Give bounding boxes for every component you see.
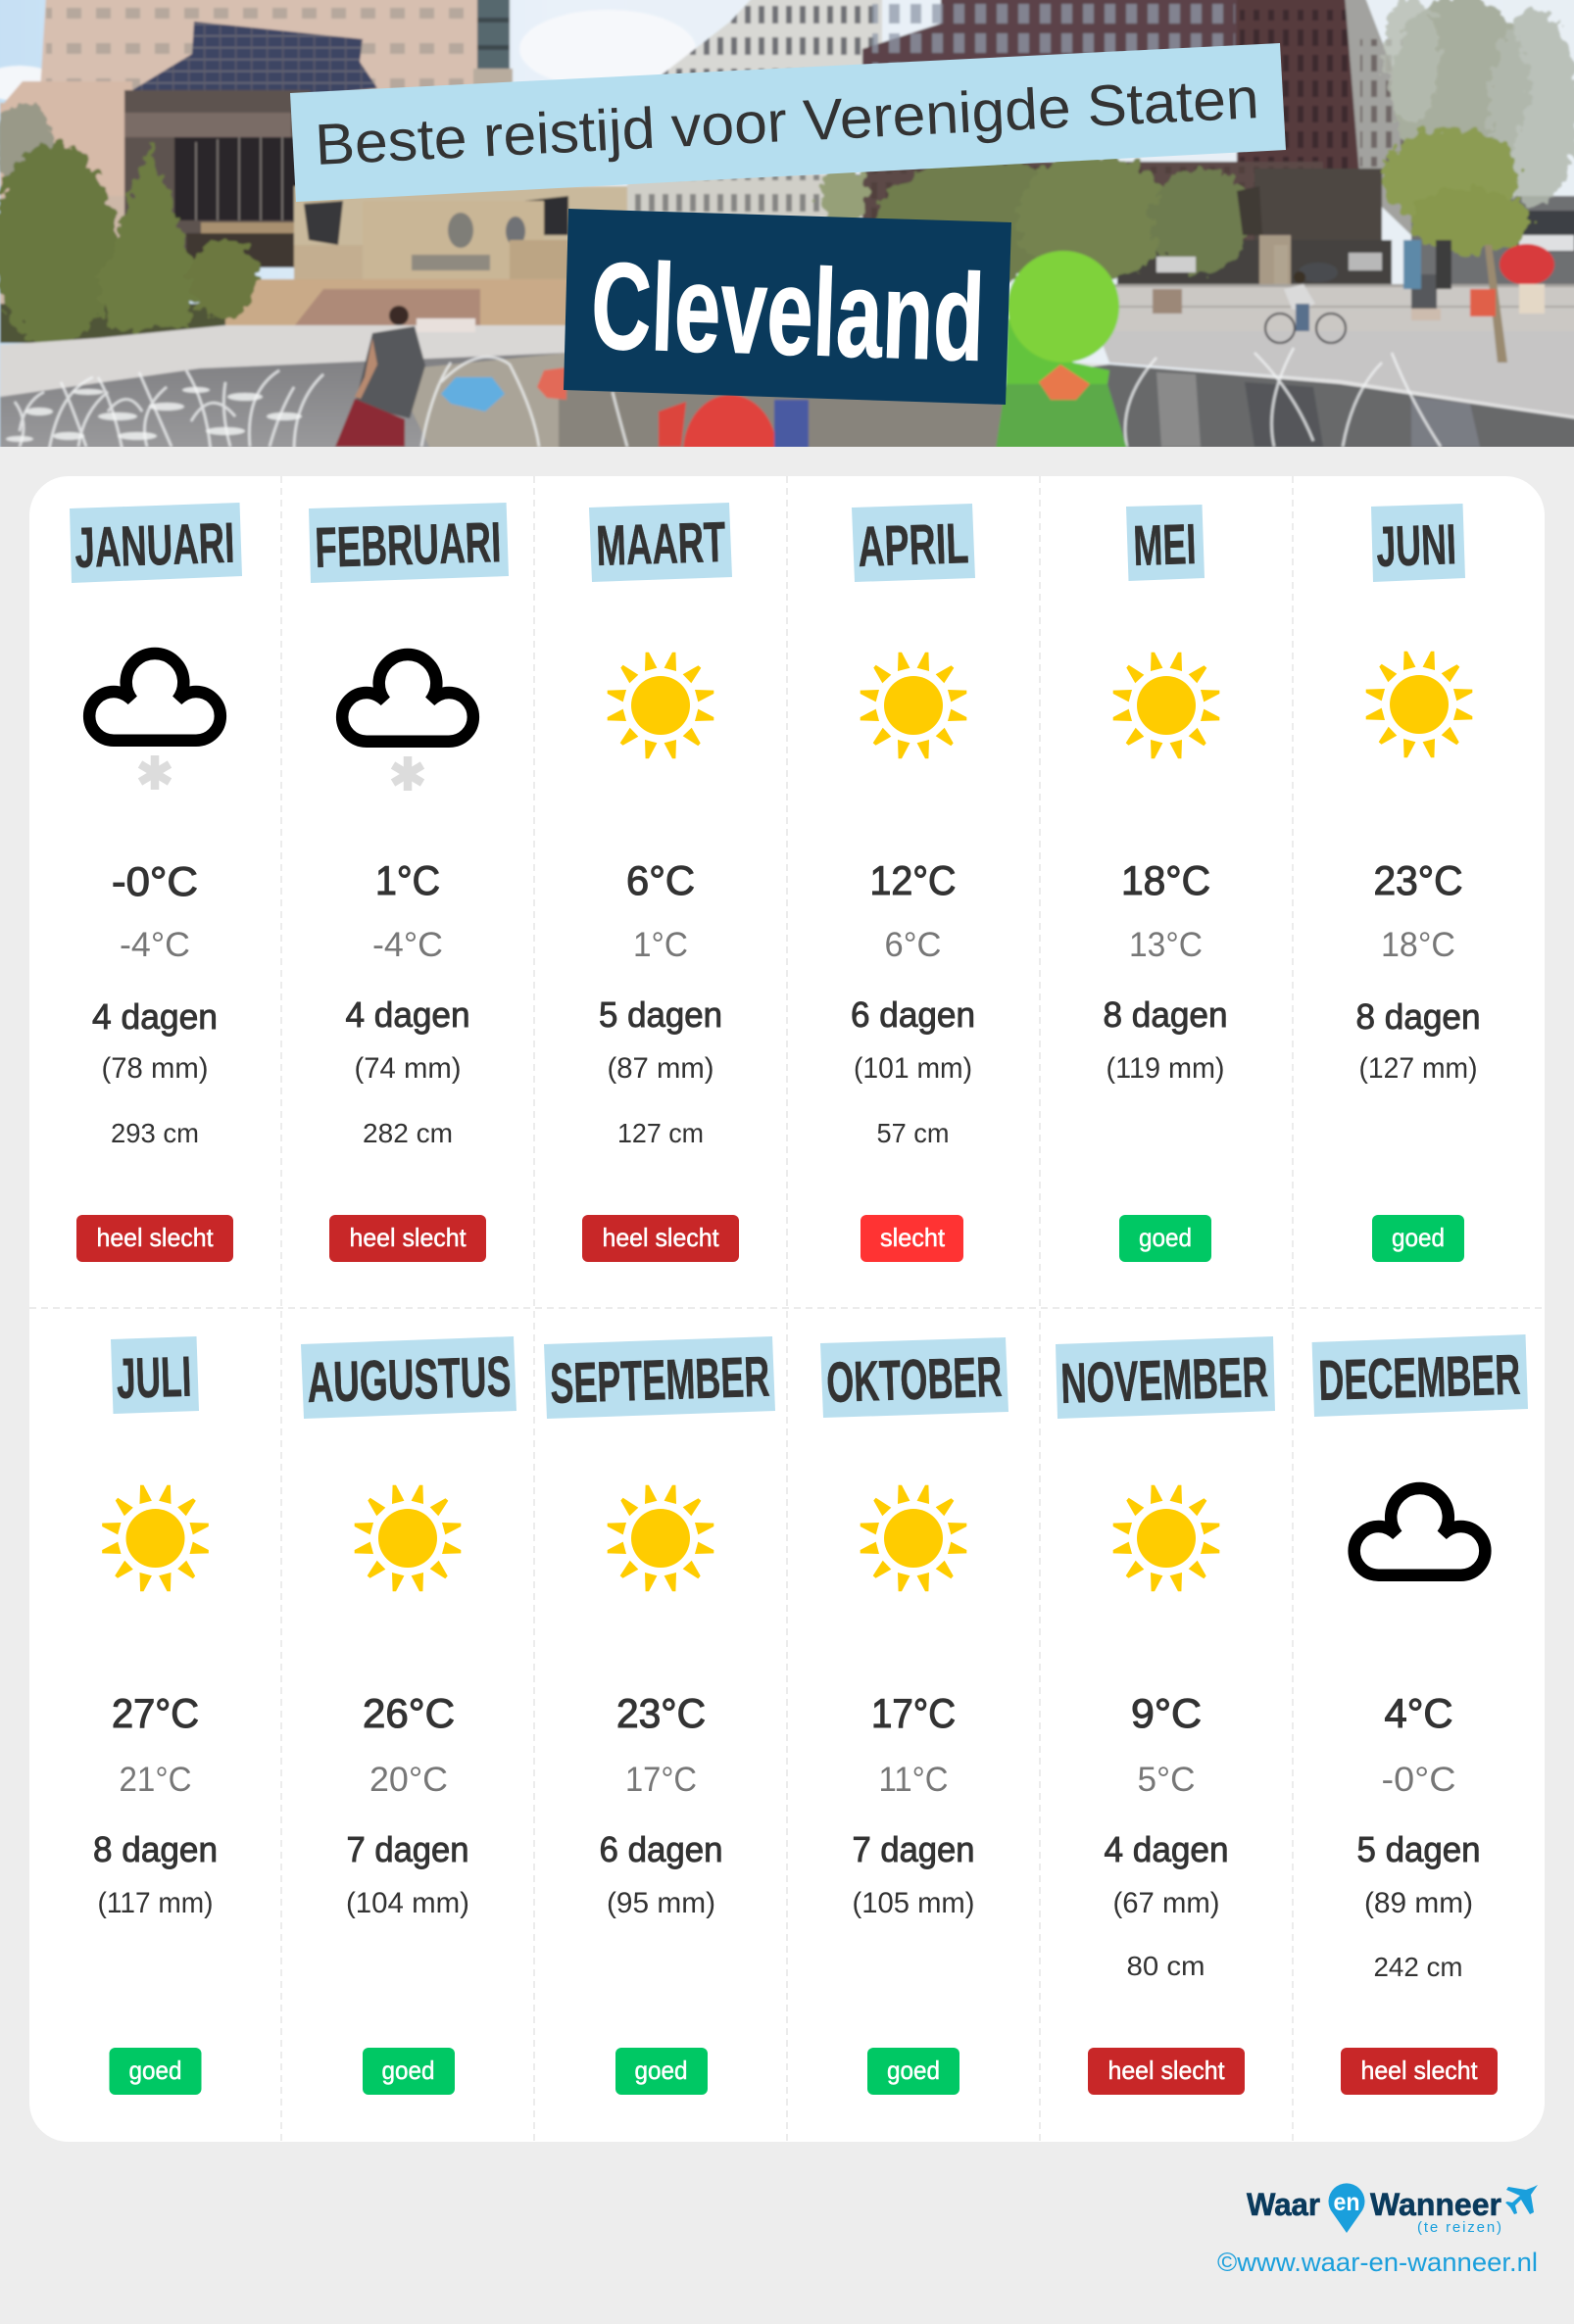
rain days: 8 dagen (1104, 994, 1227, 1035)
month: mei (1104, 505, 1227, 1262)
rating badge (1341, 2048, 1498, 2095)
heading februari: FEBRUARI (314, 510, 502, 580)
icon: sun (861, 1485, 966, 1591)
logo word: en: en (1333, 2189, 1360, 2216)
rainfall: (117 mm) (98, 1887, 214, 1919)
min temperature: 18°C (1381, 926, 1455, 964)
icon: cloud (1354, 1488, 1485, 1575)
max temperature: 18°C (1121, 857, 1210, 903)
rating badge (329, 1215, 486, 1262)
month: juni (1356, 504, 1480, 1262)
rating text: slecht (880, 1223, 946, 1252)
month: december (1312, 1334, 1528, 2095)
min temperature: -4°C (120, 926, 190, 964)
rainfall: (87 mm) (608, 1052, 713, 1085)
month: augustus (301, 1336, 516, 2095)
max temperature: 23°C (616, 1690, 706, 1736)
rating text: goed (887, 2056, 940, 2085)
max temperature: -0°C (112, 858, 198, 904)
rating badge (582, 1215, 739, 1262)
rain days: 4 dagen (345, 994, 470, 1035)
subtitle text: Beste reistijd voor Verenigde Staten (314, 66, 1260, 177)
footer website credit: ©www.waar-en-wanneer.nl (1217, 2248, 1538, 2277)
rating text: heel slecht (1107, 2056, 1225, 2085)
min temperature: 1°C (633, 926, 688, 964)
max temperature: 4°C (1384, 1690, 1452, 1736)
rating text: heel slecht (602, 1223, 719, 1252)
rain days: 7 dagen (853, 1829, 974, 1869)
icon: sun (608, 653, 713, 758)
snowfall: 127 cm (617, 1118, 704, 1148)
min temperature: 11°C (878, 1761, 949, 1799)
rainfall: (119 mm) (1106, 1052, 1225, 1085)
rating badge (1119, 1215, 1211, 1262)
rain days: 5 dagen (1356, 1829, 1480, 1869)
title text: Cleveland (589, 236, 986, 387)
month: januari (70, 503, 242, 1262)
footer logo: Waar en Wanneer (1247, 2183, 1538, 2236)
max temperature: 1°C (375, 857, 440, 903)
icon: cloud with snow (89, 654, 221, 790)
snowfall: 242 cm (1374, 1952, 1462, 1982)
rainfall: (104 mm) (346, 1887, 469, 1919)
max temperature: 9°C (1131, 1690, 1202, 1736)
icon: sun (608, 1485, 713, 1591)
rating text: goed (1392, 1223, 1445, 1252)
rating badge (861, 1215, 963, 1262)
rating badge (1372, 1215, 1464, 1262)
rating text: goed (635, 2056, 688, 2085)
rating badge (1088, 2048, 1245, 2095)
rainfall: (67 mm) (1113, 1887, 1219, 1919)
rain days: 4 dagen (92, 996, 218, 1037)
max temperature: 6°C (626, 857, 695, 903)
heading juli: JULI (116, 1345, 192, 1411)
rain days: 6 dagen (851, 994, 975, 1035)
rating text: heel slecht (349, 1223, 467, 1252)
max temperature: 27°C (112, 1690, 199, 1736)
heading januari: JANUARI (74, 511, 235, 580)
logo word: Waar: Waar (1247, 2187, 1320, 2222)
icon: airplane (1505, 2185, 1538, 2214)
rainfall: (127 mm) (1358, 1052, 1478, 1085)
rating badge (76, 1215, 233, 1262)
month: april (851, 504, 975, 1262)
heading november: NOVEMBER (1059, 1345, 1269, 1416)
month: september (544, 1336, 775, 2095)
rainfall: (78 mm) (102, 1052, 208, 1085)
month: november (1056, 1336, 1275, 2095)
rating badge (110, 2048, 202, 2095)
rain days: 7 dagen (347, 1829, 468, 1869)
icon: sun (1113, 1485, 1219, 1591)
month: juli (93, 1336, 218, 2095)
heading april: APRIL (857, 511, 969, 579)
month: maart (582, 503, 739, 1262)
logo word: Wanneer: Wanneer (1370, 2187, 1501, 2222)
min temperature: 5°C (1137, 1761, 1196, 1799)
rating text: goed (382, 2056, 435, 2085)
snowfall: 57 cm (876, 1118, 949, 1148)
min temperature: 21°C (120, 1761, 192, 1799)
snowfall: 293 cm (111, 1118, 199, 1148)
heading oktober: OKTOBER (825, 1345, 1003, 1415)
month: februari (309, 503, 509, 1262)
rain days: 5 dagen (599, 994, 722, 1035)
rating text: heel slecht (1360, 2056, 1478, 2085)
title band: Cleveland (564, 209, 1011, 405)
snowfall: 282 cm (363, 1118, 453, 1148)
min temperature: 17°C (625, 1761, 697, 1799)
rain days: 4 dagen (1104, 1829, 1229, 1869)
heading maart: MAART (595, 510, 726, 578)
rain days: 8 dagen (93, 1829, 218, 1869)
snowfall: 80 cm (1127, 1951, 1205, 1981)
rainfall: (101 mm) (854, 1052, 972, 1085)
heading september: SEPTEMBER (549, 1345, 770, 1416)
header photo: Cleveland square with fountain (0, 0, 1574, 447)
rainfall: (74 mm) (355, 1052, 461, 1085)
rating text: goed (129, 2056, 182, 2085)
subtitle band (290, 43, 1286, 202)
heading mei: MEI (1132, 512, 1197, 578)
max temperature: 26°C (363, 1690, 455, 1736)
icon: sun (355, 1485, 461, 1591)
icon: cloud with snow (342, 654, 473, 791)
rating text: heel slecht (96, 1223, 214, 1252)
rain days: 8 dagen (1356, 996, 1480, 1037)
rating badge (867, 2048, 959, 2095)
heading juni: JUNI (1375, 512, 1457, 579)
heading augustus: AUGUSTUS (306, 1344, 512, 1415)
icon: sun (1113, 653, 1219, 758)
icon: sun (861, 653, 966, 758)
logo tagline: (te reizen) (1417, 2219, 1501, 2236)
rainfall: (95 mm) (607, 1887, 715, 1919)
rating badge (363, 2048, 455, 2095)
icon: map pin (1329, 2183, 1364, 2233)
rain days: 6 dagen (600, 1829, 723, 1869)
min temperature: 20°C (369, 1761, 448, 1799)
min temperature: 13°C (1129, 926, 1203, 964)
min temperature: -0°C (1382, 1761, 1456, 1799)
rainfall: (89 mm) (1364, 1887, 1473, 1919)
panel: monthly climate table (29, 476, 1545, 2142)
min temperature: -4°C (372, 926, 443, 964)
rainfall: (105 mm) (853, 1887, 974, 1919)
min temperature: 6°C (884, 926, 941, 964)
icon: sun (1366, 652, 1472, 757)
rating badge (615, 2048, 708, 2095)
icon: sun (102, 1485, 209, 1591)
max temperature: 12°C (870, 857, 957, 903)
month: oktober (820, 1337, 1008, 2095)
rating text: goed (1139, 1223, 1192, 1252)
max temperature: 17°C (871, 1690, 956, 1736)
max temperature: 23°C (1374, 857, 1462, 903)
